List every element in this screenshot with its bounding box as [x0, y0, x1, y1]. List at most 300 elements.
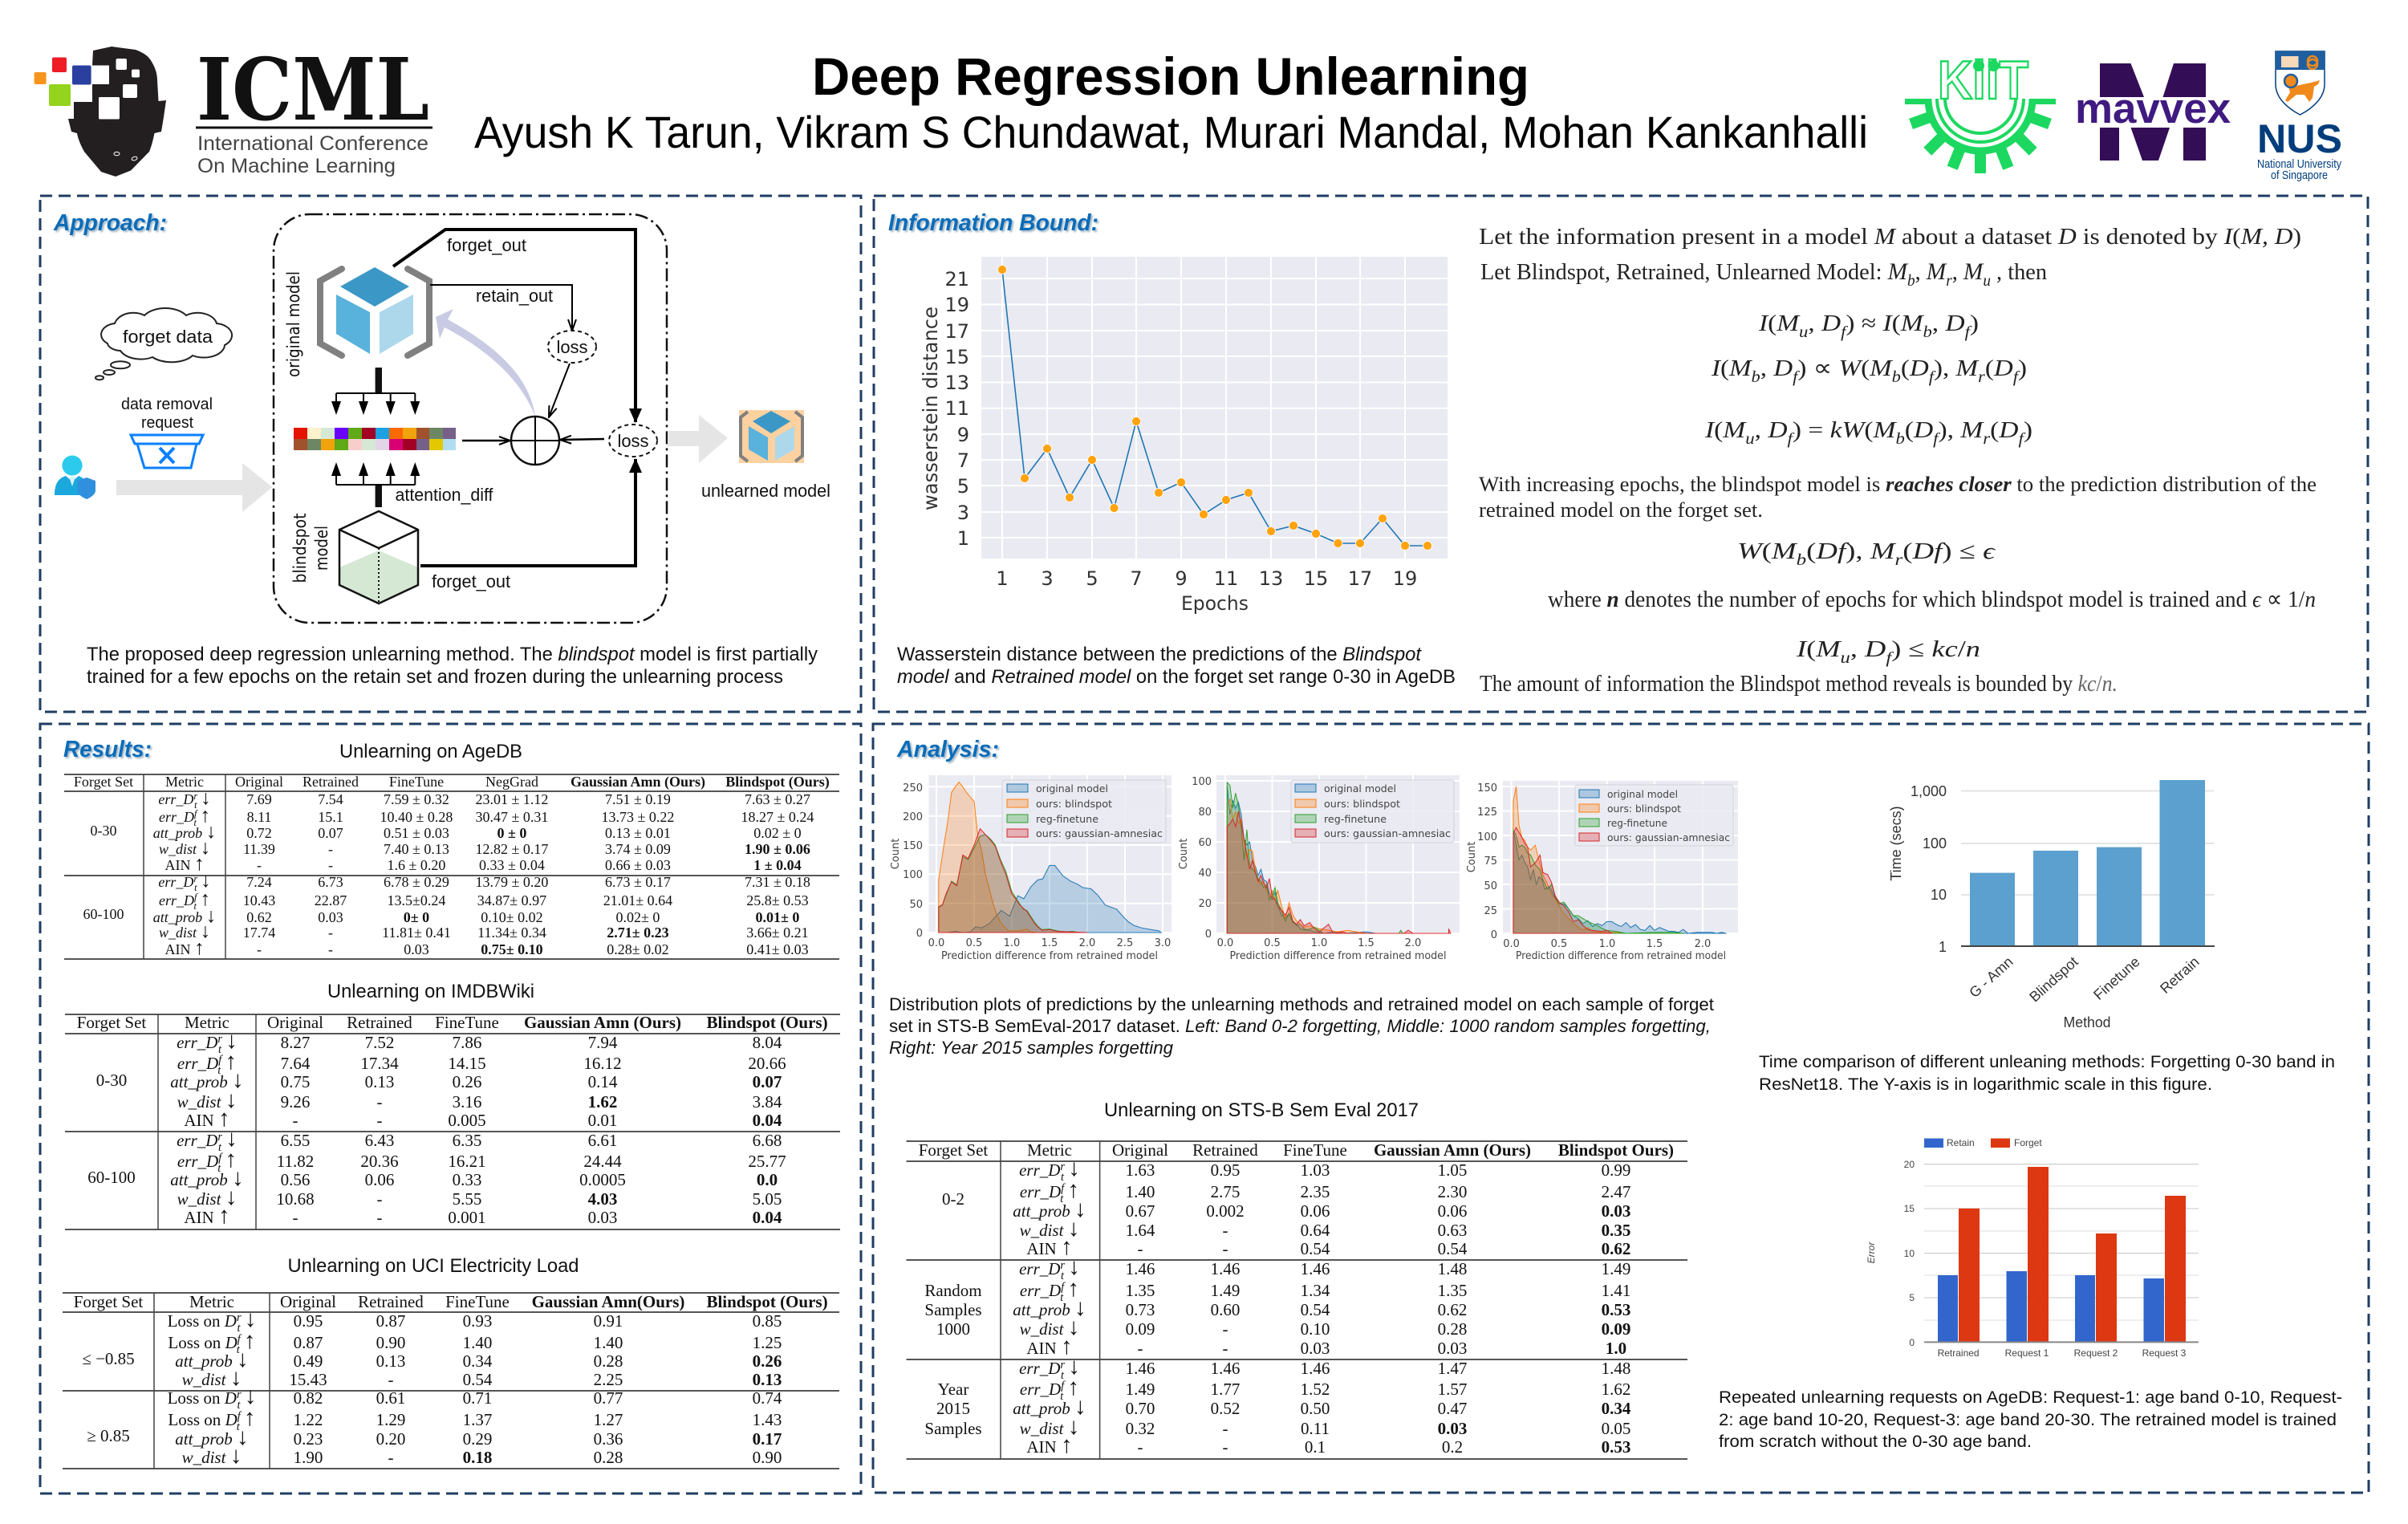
table: STS-B Sem Eval 2017: 1.05	[1438, 1160, 1467, 1180]
table: STS-B Sem Eval 2017: 1.35	[1126, 1281, 1155, 1300]
table: UCI Electricity Load: 0.49	[294, 1351, 323, 1371]
table: STS-B Sem Eval 2017: Blindspot Ours)	[1558, 1140, 1674, 1160]
table: IMDBWiki: 4.03	[588, 1189, 617, 1209]
table: AgeDB: 0.72	[246, 825, 272, 841]
chart: histogram year 2015: 1.5	[1647, 938, 1663, 950]
table: STS-B Sem Eval 2017: 0.47	[1438, 1399, 1467, 1418]
table: AgeDB: 0.02 ± 0	[753, 825, 802, 841]
table: STS-B Sem Eval 2017: 0.50	[1301, 1399, 1330, 1418]
table: STS-B Sem Eval 2017: 1.40	[1126, 1182, 1155, 1201]
chart: time comparison: 1,000	[1911, 783, 1947, 799]
table: UCI Electricity Load: 0.87	[376, 1311, 405, 1331]
chart: histogram year 2015: 100	[1477, 831, 1497, 843]
legend	[1002, 780, 1166, 843]
table: AgeDB: 0.07	[318, 825, 343, 841]
table: IMDBWiki: 20.66	[748, 1054, 786, 1073]
caption: approach	[87, 644, 818, 688]
table: STS-B Sem Eval 2017: -	[1138, 1437, 1143, 1457]
table: IMDBWiki: -	[377, 1189, 382, 1209]
table: UCI Electricity Load: 0.18	[463, 1448, 492, 1467]
table: AgeDB: FineTune	[389, 774, 444, 790]
chart: histogram random samples: 0.5	[1264, 937, 1281, 949]
arrow: retain_out	[430, 285, 572, 331]
table: STS-B Sem Eval 2017: Retrained	[1192, 1140, 1258, 1160]
table: UCI Electricity Load: 0.82	[294, 1388, 323, 1408]
icon: removal basket	[131, 435, 203, 468]
table title: UCI Electricity: Unlearning on UCI Electricity Load	[287, 1255, 579, 1277]
table: UCI Electricity Load: 1.37	[463, 1410, 492, 1429]
chart: histogram year 2015: 1.0	[1599, 938, 1615, 950]
table: STS-B Sem Eval 2017: 0.62	[1602, 1239, 1630, 1258]
table: AgeDB: 8.11	[247, 809, 271, 825]
table: IMDBWiki: Blindspot (Ours)	[706, 1013, 828, 1032]
table: STS-B Sem Eval 2017: 1.46	[1126, 1359, 1155, 1378]
table: IMDBWiki: 0.0005	[579, 1170, 626, 1189]
title: Deep Regression Unlearning	[812, 47, 1529, 106]
logo: KIIT: KiiT	[1938, 50, 2028, 111]
table: UCI Electricity Load: 0.17	[753, 1429, 782, 1449]
ICML subtitle: On Machine Learning	[197, 155, 396, 177]
table: IMDBWiki: 8.04	[753, 1033, 782, 1052]
table: UCI Electricity Load: 0.71	[463, 1388, 492, 1408]
table: IMDBWiki	[65, 1013, 840, 1229]
table: STS-B Sem Eval 2017: 0.95	[1211, 1160, 1240, 1180]
table: STS-B Sem Eval 2017: 1.35	[1438, 1281, 1467, 1300]
label: retain_out: retain_out	[476, 286, 553, 306]
table: AgeDB: 0.62	[246, 909, 272, 925]
table: STS-B Sem Eval 2017: 1.46	[1211, 1259, 1240, 1278]
table: STS-B Sem Eval 2017: 0.70	[1126, 1399, 1155, 1418]
chart: repeated unlearning requests: Request 3	[2142, 1347, 2187, 1359]
table: IMDBWiki: AIN ↑	[184, 1106, 230, 1132]
caption: approach: The proposed deep regression unlearning method. The blindspot model is first partially	[87, 644, 818, 665]
chart: repeated unlearning requests	[1866, 1137, 2199, 1359]
chart: histogram band 0-2: 1.0	[1004, 937, 1020, 949]
table: UCI Electricity Load: 0.28	[594, 1448, 623, 1467]
chart: histogram random samples: Prediction difference from retrained model	[1229, 950, 1446, 962]
table: IMDBWiki: w_dist ↓	[177, 1185, 237, 1210]
table: IMDBWiki: -	[292, 1208, 298, 1227]
table: STS-B Sem Eval 2017: 0.34	[1602, 1399, 1631, 1418]
table: STS-B Sem Eval 2017: -	[1223, 1239, 1228, 1258]
chart: time comparison: Time (secs)	[1888, 806, 1904, 881]
chart: wasserstein distance line: 11	[1214, 567, 1238, 590]
table: STS-B Sem Eval 2017: 0.99	[1602, 1160, 1630, 1180]
table: IMDBWiki: 0.33	[453, 1170, 481, 1189]
icon: ICML head	[35, 47, 166, 177]
legend: reg-finetune	[1324, 814, 1387, 825]
table: STS-B Sem Eval 2017: 0.32	[1126, 1419, 1155, 1438]
table: STS-B Sem Eval 2017: 1.77	[1211, 1380, 1240, 1399]
table: IMDBWiki: 10.68	[276, 1189, 315, 1209]
table: IMDBWiki: 7.64	[281, 1054, 311, 1073]
table: AgeDB: 7.69	[246, 791, 272, 807]
table: IMDBWiki: 0-30	[96, 1071, 127, 1090]
table: AgeDB: -	[257, 857, 262, 873]
chart: time comparison	[1888, 780, 2215, 1030]
legend: ours: gaussian-amnesiac	[1324, 828, 1451, 839]
table: AgeDB: 0.66 ± 0.03	[605, 857, 671, 873]
table: IMDBWiki: 1.62	[588, 1092, 617, 1112]
chart: wasserstein distance line: 17	[1348, 567, 1372, 590]
chart: wasserstein distance line: 5	[1086, 567, 1098, 590]
table: AgeDB: 0-30	[90, 823, 117, 839]
heading: approach: Approach:	[53, 210, 167, 236]
table: STS-B Sem Eval 2017: AIN ↑	[1026, 1334, 1073, 1359]
table: AgeDB: err_Dft ↑	[159, 805, 210, 828]
table: UCI Electricity Load: Retrained	[358, 1292, 424, 1311]
chart: histogram band 0-2: 200	[903, 811, 923, 823]
table: AgeDB: 1.90 ± 0.06	[745, 841, 810, 857]
table: AgeDB: 23.01 ± 1.12	[476, 791, 548, 807]
ICML wordmark: ICML	[197, 40, 429, 140]
icon: blindspot wire cube	[339, 511, 418, 604]
chart: wasserstein distance line: 15	[944, 346, 969, 368]
table: AgeDB: 0.33 ± 0.04	[479, 857, 545, 873]
chart: histogram year 2015: Prediction difference from retrained model	[1516, 950, 1726, 962]
table title: AgeDB: Unlearning on AgeDB	[339, 741, 522, 762]
table: IMDBWiki: 6.68	[753, 1131, 782, 1150]
table: STS-B Sem Eval 2017: 1000	[936, 1319, 970, 1339]
table: UCI Electricity Load: 1.22	[294, 1410, 323, 1429]
table: STS-B Sem Eval 2017: 1.49	[1602, 1259, 1630, 1278]
label: blindspot model: model	[312, 526, 331, 571]
arrow: loss to plus	[549, 364, 570, 417]
table: AgeDB: NegGrad	[485, 774, 538, 790]
table: IMDBWiki: 16.21	[448, 1152, 486, 1171]
table: AgeDB: 1.6 ± 0.20	[388, 857, 445, 873]
table: STS-B Sem Eval 2017: 0.03	[1438, 1419, 1467, 1438]
upper feature attention arrows	[331, 368, 420, 415]
text: epochs statement	[1479, 473, 2317, 522]
chart: histogram random samples: 0.0	[1217, 937, 1233, 949]
chart: histogram band 0-2: 1.5	[1042, 937, 1058, 949]
table: UCI Electricity Load: 1.40	[594, 1333, 623, 1352]
table: STS-B Sem Eval 2017: 1.0	[1606, 1339, 1626, 1358]
table: UCI Electricity Load: 2.25	[594, 1370, 623, 1389]
label: forget_out top: forget_out	[447, 235, 526, 255]
chart: wasserstein distance line: 21	[944, 268, 969, 291]
logo: NUS: of Singapore	[2271, 169, 2328, 182]
chart: time comparison: G - Amn	[1966, 953, 2016, 1001]
equation 2: I(Mb, Df) ∝ W(Mb(Df), Mr(Df)	[1711, 356, 2027, 386]
chart: wasserstein distance line: 5	[957, 475, 969, 498]
table: UCI Electricity Load: 1.43	[753, 1410, 782, 1429]
caption: time comparison	[1759, 1053, 2335, 1094]
caption: approach: trained for a few epochs on the retain set and frozen during the unlearning process	[87, 666, 783, 688]
logo: NUS: National University	[2257, 157, 2341, 171]
table: STS-B Sem Eval 2017: 0.09	[1126, 1319, 1155, 1339]
table: IMDBWiki: -	[377, 1092, 382, 1112]
chart: histogram band 0-2: 0.0	[928, 937, 944, 949]
table: UCI Electricity Load: 0.61	[376, 1388, 405, 1408]
table: IMDBWiki: -	[377, 1111, 382, 1130]
chart: histogram band 0-2: 150	[903, 840, 923, 852]
table: IMDBWiki: 0.001	[448, 1208, 486, 1227]
chart: histogram year 2015	[1466, 781, 1738, 962]
legend	[1575, 785, 1733, 846]
chart: wasserstein distance line: 1	[996, 567, 1009, 590]
table: UCI Electricity Load: 1.40	[463, 1333, 492, 1352]
table: UCI Electricity Load: FineTune	[445, 1292, 510, 1311]
legend: ours: gaussian-amnesiac	[1036, 828, 1163, 839]
chart: histogram year 2015: 50	[1484, 880, 1497, 892]
table: STS-B Sem Eval 2017: 1.48	[1602, 1359, 1630, 1378]
legend: original model	[1036, 783, 1108, 795]
table: STS-B Sem Eval 2017: 0.62	[1438, 1300, 1467, 1319]
table: IMDBWiki: 0.13	[365, 1072, 394, 1091]
chart: histogram year 2015: 25	[1484, 905, 1497, 917]
chart: histogram random samples: 20	[1198, 898, 1212, 910]
table: IMDBWiki: 5.05	[753, 1189, 782, 1209]
arrow: forget_out top	[393, 230, 636, 422]
table: UCI Electricity Load: Loss on Drt ↓	[168, 1307, 256, 1335]
table: IMDBWiki: 6.43	[365, 1131, 394, 1150]
table: STS-B Sem Eval 2017: 0.03	[1438, 1339, 1467, 1358]
table: IMDBWiki: 16.12	[583, 1054, 622, 1073]
chart: histogram year 2015: Count	[1466, 842, 1478, 872]
legend: reg-finetune	[1036, 814, 1098, 825]
table: UCI Electricity Load: ≥ 0.85	[87, 1426, 130, 1445]
table: STS-B Sem Eval 2017: 2015	[936, 1399, 970, 1418]
authors: Ayush K Tarun, Vikram S Chundawat, Murari Mandal, Mohan Kankanhalli	[474, 107, 1868, 157]
table: UCI Electricity Load: 0.13	[376, 1351, 405, 1371]
table: IMDBWiki: -	[377, 1208, 382, 1227]
chart: wasserstein distance line: 7	[957, 449, 969, 472]
table: STS-B Sem Eval 2017: -	[1223, 1319, 1228, 1339]
table: STS-B Sem Eval 2017: 0.54	[1301, 1239, 1330, 1258]
table: IMDBWiki: 0.03	[588, 1208, 617, 1227]
table: AgeDB: 7.40 ± 0.13	[384, 841, 449, 857]
table: STS-B Sem Eval 2017: 1.03	[1301, 1160, 1330, 1180]
table: AgeDB: 0.41± 0.03	[746, 941, 809, 957]
table: STS-B Sem Eval 2017: 0.53	[1602, 1300, 1630, 1319]
curved feedback arrow	[436, 309, 535, 417]
chart: histogram year 2015: 2.0	[1695, 938, 1711, 950]
icon: NUS crest	[2276, 51, 2325, 115]
feature attention colour grid	[294, 428, 456, 450]
table: STS-B Sem Eval 2017: 2.35	[1301, 1182, 1330, 1201]
table: UCI Electricity Load: Metric	[189, 1292, 234, 1311]
table: IMDBWiki: 8.27	[281, 1033, 310, 1052]
table: IMDBWiki: 24.44	[583, 1152, 622, 1171]
table: IMDBWiki: 7.94	[588, 1033, 618, 1052]
table: STS-B Sem Eval 2017: 0.54	[1301, 1300, 1330, 1319]
heading: information bound: Information Bound:	[888, 210, 1098, 236]
chart: histogram year 2015: 125	[1477, 807, 1497, 819]
icon: user with shield	[55, 456, 95, 499]
table: AgeDB: 11.39	[243, 841, 275, 857]
chart: histogram random samples: Count	[1178, 839, 1190, 869]
table: AgeDB: 0.01± 0	[756, 909, 799, 925]
table: STS-B Sem Eval 2017: err_Dft ↑	[1020, 1177, 1079, 1205]
table: STS-B Sem Eval 2017: 0.002	[1206, 1201, 1245, 1221]
chart: histogram band 0-2: 2.0	[1079, 937, 1095, 949]
table: IMDBWiki: 60-100	[87, 1168, 136, 1187]
caption: repeated unlearning: 2: age band 10-20, Request-3: age band 20-30. The retrained model is trained	[1719, 1411, 2337, 1429]
table: AgeDB: err_Drt ↓	[158, 787, 211, 811]
table: STS-B Sem Eval 2017: -	[1223, 1339, 1228, 1358]
table: AgeDB: 7.63 ± 0.27	[745, 791, 810, 807]
table: STS-B Sem Eval 2017: Random	[924, 1281, 982, 1300]
table: UCI Electricity Load: Original	[280, 1292, 336, 1311]
table: IMDBWiki: 6.35	[453, 1131, 481, 1150]
table: STS-B Sem Eval 2017: 0.09	[1602, 1319, 1630, 1339]
arrow: loss to plus lower	[560, 439, 604, 440]
table: UCI Electricity Load: Loss on Dft ↑	[168, 1328, 256, 1356]
legend: original model	[1324, 783, 1396, 795]
ICML subtitle: International Conference	[197, 132, 428, 155]
table: AgeDB: 13.5±0.24	[388, 892, 445, 908]
table: IMDBWiki: 6.55	[281, 1131, 310, 1150]
chart: histogram band 0-2: 3.0	[1155, 937, 1171, 949]
logo: mavvex	[2075, 63, 2231, 161]
chart: time comparison: 1	[1939, 939, 1947, 955]
table: AgeDB: -	[257, 941, 262, 957]
chart: histogram band 0-2: 50	[909, 899, 923, 911]
chart: wasserstein distance line: 3	[1041, 567, 1054, 590]
chart: histogram band 0-2: 2.5	[1117, 937, 1133, 949]
label: original model: original model	[284, 271, 303, 377]
label: data removal request	[121, 396, 213, 432]
table: AgeDB: 10.40 ± 0.28	[380, 809, 453, 825]
table: STS-B Sem Eval 2017: att_prob ↓	[1013, 1295, 1086, 1321]
table: STS-B Sem Eval 2017: err_Dft ↑	[1020, 1375, 1079, 1403]
table: AgeDB: 7.31 ± 0.18	[745, 874, 810, 890]
table title: IMDBWiki: Unlearning on IMDBWiki	[327, 981, 534, 1002]
table: UCI Electricity Load: 1.27	[594, 1410, 623, 1429]
table: STS-B Sem Eval 2017: 2.30	[1438, 1182, 1467, 1201]
outer dash-dot container	[274, 214, 667, 623]
text: epochs statement: retrained model on the forget set.	[1479, 498, 1763, 522]
table: AgeDB: w_dist ↓	[159, 920, 210, 942]
caption: repeated unlearning	[1719, 1388, 2342, 1451]
table: UCI Electricity Load: 0.34	[463, 1351, 493, 1371]
table: STS-B Sem Eval 2017: Gaussian Amn (Ours)	[1374, 1140, 1531, 1160]
caption: wasserstein chart: model and Retrained model on the forget set range 0-30 in AgeDB	[897, 666, 1456, 688]
table: STS-B Sem Eval 2017	[907, 1140, 1687, 1459]
table: STS-B Sem Eval 2017: Samples	[924, 1300, 982, 1319]
legend: ours: blindspot	[1607, 803, 1681, 815]
table: UCI Electricity Load: Blindspot (Ours)	[706, 1292, 828, 1311]
table: UCI Electricity Load: 0.93	[463, 1311, 492, 1331]
table: AgeDB: 34.87± 0.97	[477, 892, 546, 908]
table: AgeDB: 0.28± 0.02	[607, 941, 669, 957]
table: AgeDB: 22.87	[315, 892, 347, 908]
table: STS-B Sem Eval 2017: w_dist ↓	[1020, 1216, 1079, 1242]
table: UCI Electricity Load: Gaussian Amn(Ours)	[532, 1292, 684, 1311]
table: STS-B Sem Eval 2017: err_Drt ↓	[1019, 1254, 1080, 1282]
table: UCI Electricity Load: 0.20	[376, 1429, 405, 1449]
caption: wasserstein chart: Wasserstein distance between the predictions of the Blindspot	[897, 644, 1422, 665]
chart: histogram year 2015: 150	[1477, 782, 1497, 795]
chart: wasserstein distance line: 19	[944, 294, 969, 316]
table: AgeDB: 6.73	[318, 874, 343, 890]
table: AgeDB: 0.75± 0.10	[481, 941, 543, 957]
table: STS-B Sem Eval 2017: 1.57	[1438, 1380, 1467, 1399]
label: unlearned model: unlearned model	[701, 481, 830, 501]
loss node upper: loss	[556, 337, 588, 357]
table: STS-B Sem Eval 2017: 0.67	[1126, 1201, 1155, 1221]
heading: analysis: Analysis:	[896, 737, 999, 762]
table: IMDBWiki: Metric	[185, 1013, 229, 1032]
icon: unlearned model cube	[739, 410, 804, 463]
label: attention_diff: attention_diff	[395, 485, 493, 505]
table: STS-B Sem Eval 2017: 0.06	[1301, 1201, 1330, 1221]
chart: wasserstein distance line: 9	[1175, 567, 1188, 590]
table: AgeDB: 11.81± 0.41	[382, 925, 451, 941]
chart: wasserstein distance line: 7	[1130, 567, 1143, 590]
table: IMDBWiki: 0.06	[365, 1170, 394, 1189]
table: IMDBWiki: 14.15	[448, 1054, 486, 1073]
label: blindspot model: blindspot	[290, 514, 310, 583]
chart: histogram band 0-2	[890, 775, 1172, 962]
table: AgeDB: 0 ± 0	[497, 825, 526, 841]
table: AgeDB: 25.8± 0.53	[746, 892, 809, 908]
table: STS-B Sem Eval 2017: 0.06	[1438, 1201, 1467, 1221]
table: AgeDB: 0.13 ± 0.01	[605, 825, 671, 841]
loss node lower: loss	[617, 431, 649, 451]
table: UCI Electricity Load: 0.26	[753, 1351, 782, 1371]
table: AgeDB: -	[328, 941, 333, 957]
table: AgeDB: 0.51 ± 0.03	[384, 825, 449, 841]
table: STS-B Sem Eval 2017: 0.10	[1301, 1319, 1330, 1339]
table: AgeDB: 13.79 ± 0.20	[476, 874, 548, 890]
table: AgeDB: AIN ↑	[164, 937, 205, 959]
chart: time comparison: Retrain	[2157, 953, 2203, 997]
lower attention arrows	[331, 462, 420, 507]
table: STS-B Sem Eval 2017: 1.46	[1211, 1359, 1240, 1378]
table: AgeDB: Original	[235, 774, 283, 790]
caption: distribution plots: set in STS-B SemEval-2017 dataset. Left: Band 0-2 forgetting, Middle: 1000 random samples forgetting,	[889, 1016, 1711, 1036]
chart: wasserstein distance line: wasserstein distance	[919, 307, 942, 510]
table: STS-B Sem Eval 2017: 1.63	[1126, 1160, 1155, 1180]
logo: NUS	[2257, 51, 2342, 182]
chart: repeated unlearning requests: 15	[1904, 1203, 1915, 1214]
table: AgeDB: 7.24	[246, 874, 272, 890]
table: STS-B Sem Eval 2017: -	[1138, 1339, 1143, 1358]
table: UCI Electricity Load: 0.85	[753, 1311, 782, 1331]
table: STS-B Sem Eval 2017: 1.52	[1301, 1380, 1330, 1399]
table: IMDBWiki: Forget Set	[77, 1013, 146, 1032]
table: STS-B Sem Eval 2017: -	[1138, 1239, 1143, 1258]
icon: forget data thought cloud: forget data	[123, 327, 213, 347]
table: STS-B Sem Eval 2017: 1.41	[1602, 1281, 1630, 1300]
chart: time comparison: Finetune	[2090, 953, 2143, 1003]
chart: histogram band 0-2: 0	[916, 928, 923, 940]
chart: histogram year 2015: 0	[1491, 929, 1497, 941]
table: AgeDB: att_prob ↓	[153, 821, 216, 843]
table: STS-B Sem Eval 2017: err_Dft ↑	[1020, 1276, 1079, 1304]
table: STS-B Sem Eval 2017: err_Drt ↓	[1019, 1156, 1080, 1184]
table: STS-B Sem Eval 2017: 0.54	[1438, 1239, 1468, 1258]
table: STS-B Sem Eval 2017: 0.35	[1602, 1221, 1630, 1240]
text: epochs statement: With increasing epochs, the blindspot model is reaches closer to the prediction distribution of the	[1479, 473, 2317, 496]
table: STS-B Sem Eval 2017: 0.05	[1602, 1419, 1630, 1438]
table: STS-B Sem Eval 2017: -	[1223, 1221, 1228, 1240]
caption: repeated unlearning: from scratch without the 0-30 age band.	[1719, 1433, 2032, 1451]
table: AgeDB: 3.66± 0.21	[746, 925, 809, 941]
table: UCI Electricity Load: 0.77	[594, 1388, 623, 1408]
table: UCI Electricity Load: 1.90	[294, 1448, 323, 1467]
equation 5: I(M u, D f) ≤ kc/n	[1796, 636, 1980, 667]
table: UCI Electricity Load: 0.36	[594, 1429, 623, 1449]
table: IMDBWiki: err_Drt ↓	[177, 1028, 238, 1056]
table: STS-B Sem Eval 2017: 0.2	[1442, 1437, 1463, 1457]
chart: wasserstein distance line: 15	[1304, 567, 1328, 590]
table: AgeDB: 10.43	[243, 892, 275, 908]
table: UCI Electricity Load: -	[388, 1370, 393, 1389]
